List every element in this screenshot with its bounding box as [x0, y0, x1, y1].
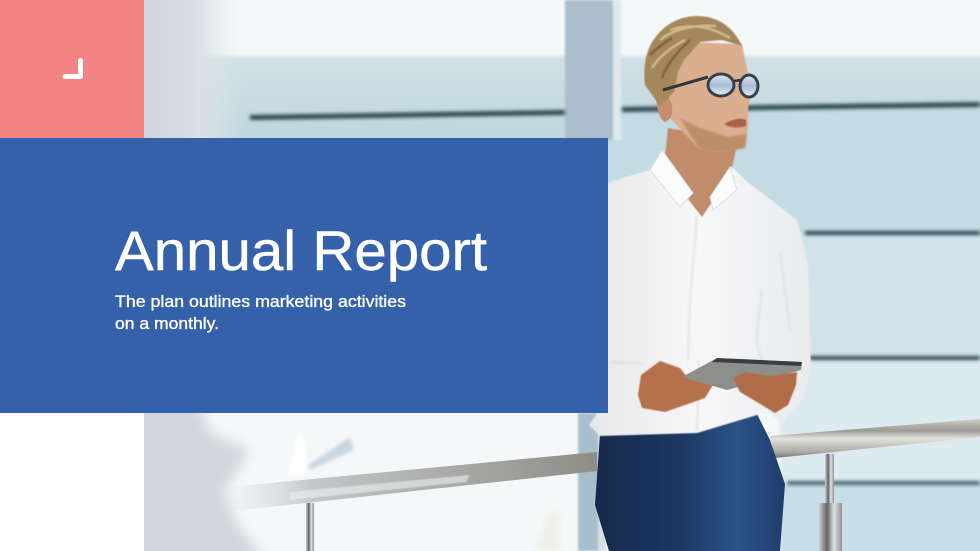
blurred plane shapes [288, 432, 560, 551]
collar [650, 150, 737, 210]
panel: title [0, 138, 608, 413]
window column [565, 0, 621, 551]
ear [656, 92, 672, 122]
subtitle: The plan outlines marketing activities [115, 292, 406, 311]
handrail [217, 419, 980, 551]
person [589, 16, 811, 551]
hair [644, 16, 742, 106]
beard shadow [680, 118, 747, 153]
subtitle: on a monthly. [115, 314, 219, 333]
trousers [595, 414, 785, 551]
mouth [724, 119, 746, 128]
glasses [663, 74, 758, 97]
right hand [733, 372, 797, 413]
left hand [638, 361, 713, 412]
neck [664, 128, 738, 218]
title: Annual Report [115, 219, 487, 282]
accent block [0, 0, 144, 138]
tablet [682, 358, 802, 390]
shirt details [610, 215, 790, 432]
icon: corner mark [65, 60, 80, 76]
left grey wall [144, 0, 262, 551]
shirt [589, 151, 811, 436]
face [666, 42, 750, 153]
window frame lines [250, 102, 980, 485]
